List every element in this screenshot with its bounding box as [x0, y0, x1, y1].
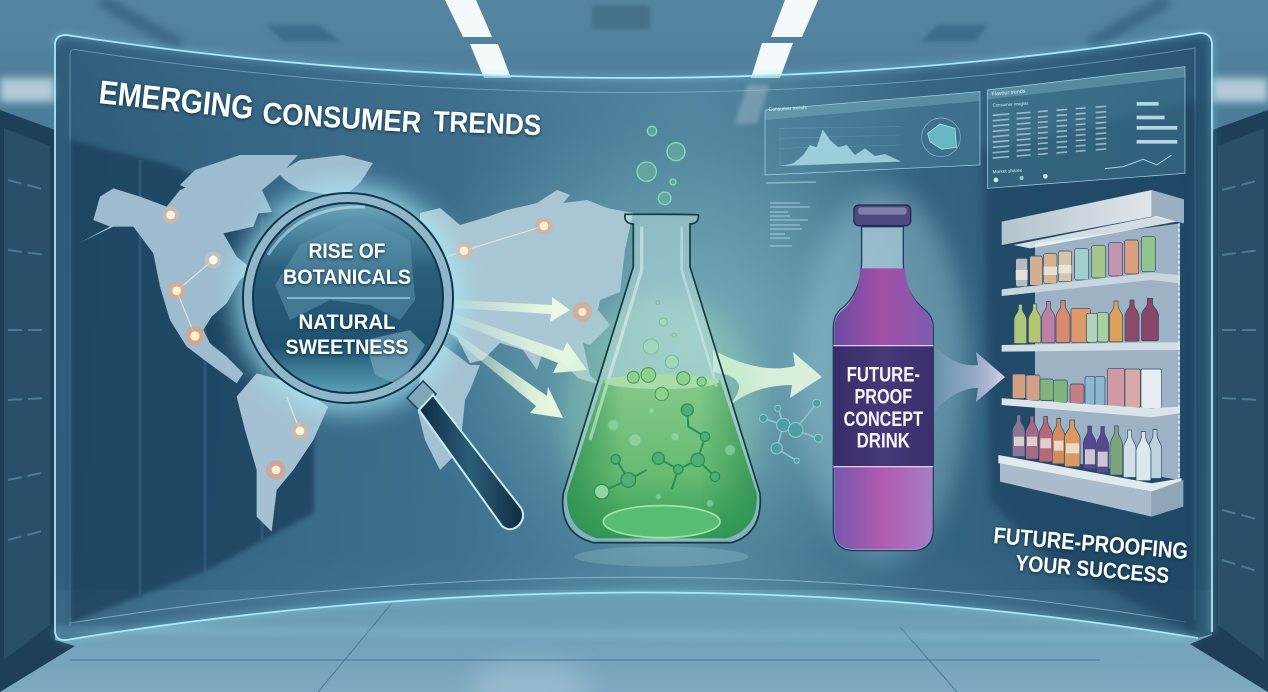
- closing caption: [993, 522, 1189, 588]
- area chart: [780, 129, 900, 166]
- shelf 4 products: [1012, 415, 1162, 481]
- lens text: rise of botanicals: [283, 240, 411, 289]
- arrow: bottle to shelf: [934, 345, 1005, 412]
- arrow: flask to bottle: [713, 350, 822, 412]
- canopy: [1002, 190, 1152, 245]
- lens text: natural sweetness: [286, 311, 408, 359]
- glass body: [563, 214, 760, 543]
- concept bottle: [833, 205, 933, 551]
- bubbles above flask: [637, 126, 685, 205]
- molecule between flask and bottle: [759, 399, 822, 463]
- dark server columns through panel: [70, 140, 314, 623]
- shelf upright: [1177, 223, 1181, 480]
- bottom shelf and base: [998, 455, 1182, 492]
- label text: PROOF: [854, 385, 912, 408]
- radar chart: [922, 118, 960, 157]
- glass: [833, 227, 933, 551]
- table rows: [993, 105, 1127, 158]
- south america: [237, 373, 328, 532]
- line chart: [1105, 155, 1172, 169]
- flask: [562, 126, 762, 567]
- world map: [80, 155, 633, 532]
- label text: FUTURE-: [847, 364, 920, 387]
- dashboard: consumer trends: Consumer trends: [768, 105, 807, 113]
- dashboard: consumer trends: [765, 92, 980, 175]
- closing caption: FUTURE-PROOFING: [993, 522, 1189, 564]
- cap: [854, 205, 911, 226]
- dashboard: flavour trends table: Consumer insights: [992, 101, 1028, 108]
- location nodes: [162, 206, 592, 480]
- back wall: [1035, 223, 1180, 480]
- server rack right: [1190, 110, 1268, 692]
- dark server columns right: [983, 100, 1197, 635]
- bottle glow backdrop: [799, 190, 969, 560]
- shelf 1 products: [1016, 237, 1155, 287]
- lens text: rise of botanicals: RISE OF: [308, 240, 386, 263]
- arctic islands: [180, 155, 298, 215]
- legend dots: [994, 174, 1048, 182]
- label: [833, 346, 933, 467]
- greenland: [278, 155, 373, 197]
- label text: DRINK: [857, 429, 910, 452]
- label text: CONCEPT: [844, 408, 923, 431]
- title: [97, 73, 542, 142]
- server rack left: [0, 110, 75, 692]
- molecule in liquid: [602, 410, 715, 492]
- lens: [243, 193, 453, 403]
- title: TRENDS: [433, 106, 542, 142]
- liquid: [567, 380, 757, 538]
- glow: [233, 183, 463, 413]
- closing caption: YOUR SUCCESS: [1015, 550, 1170, 588]
- eurasia: [420, 190, 633, 385]
- africa: [415, 335, 480, 470]
- connection lines: [177, 226, 544, 431]
- foam bubbles: [627, 368, 706, 401]
- north and central america: [80, 183, 262, 383]
- arrows: trends to flask: [452, 297, 587, 418]
- shelf 2 products: [1014, 298, 1158, 344]
- lens text: rise of botanicals: BOTANICALS: [283, 266, 411, 289]
- title: EMERGING: [97, 73, 255, 126]
- ceiling lights: [445, 0, 818, 124]
- store shelf: [998, 190, 1184, 517]
- magnifying glass: [233, 183, 523, 529]
- lens text: natural sweetness: NATURAL: [298, 311, 396, 334]
- product labels: [1014, 265, 1108, 467]
- lens text: natural sweetness: SWEETNESS: [286, 336, 408, 359]
- label text: [844, 364, 923, 452]
- purple drink: [834, 268, 932, 347]
- gulf of mexico: [205, 322, 237, 347]
- dashboard: flavour trends table: Flavour trends: [991, 89, 1026, 98]
- dashboard: flavour trends table: [987, 67, 1185, 188]
- rising bubbles in flask: [608, 301, 735, 506]
- progress bars: [1137, 102, 1177, 144]
- reflection: [575, 547, 748, 567]
- title: CONSUMER: [262, 97, 423, 140]
- handle: [407, 381, 523, 529]
- dashboard: flavour trends table: Market shares: [992, 168, 1023, 174]
- shelf 3 products: [1012, 368, 1162, 408]
- side text list: [766, 182, 816, 246]
